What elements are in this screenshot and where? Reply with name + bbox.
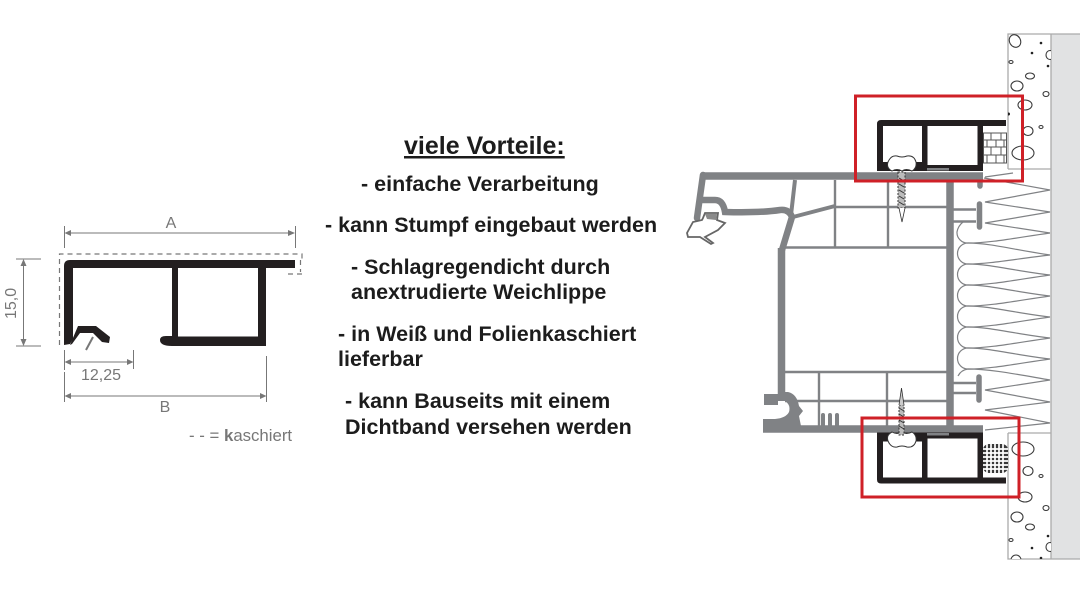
fixing anchor bottom bbox=[953, 383, 976, 393]
text block: advantages bbox=[325, 172, 657, 439]
legend: kaschiert: - - = kaschiert bbox=[189, 426, 292, 445]
advantage 2: - kann Stumpf eingebaut werden bbox=[325, 213, 657, 237]
advantage 3: anextrudierte Weichlippe bbox=[351, 280, 606, 304]
gasket lip bbox=[70, 326, 110, 350]
advantage 3: - Schlagregendicht durch bbox=[351, 255, 610, 279]
panel: window installation section bbox=[687, 33, 1080, 565]
inner webs bbox=[785, 180, 948, 426]
black profile section bbox=[64, 260, 295, 346]
profile bottom bbox=[877, 432, 1006, 484]
dimension 12,25 bbox=[64, 350, 134, 384]
dimension A bbox=[64, 215, 296, 248]
wall: concrete with stones bbox=[1007, 33, 1080, 565]
teeth on sill bbox=[823, 415, 837, 426]
dimension 15,0 bbox=[3, 259, 41, 346]
panel: profile cross-section diagram bbox=[3, 215, 302, 445]
small foil strip bbox=[927, 433, 949, 436]
heading: viele Vorteile: bbox=[404, 132, 565, 160]
wall: grey plaster band bbox=[1051, 34, 1080, 559]
profile top bbox=[877, 120, 1006, 171]
dimension B bbox=[64, 356, 266, 416]
advantage 4: lieferbar bbox=[338, 347, 423, 371]
dimension B: B bbox=[160, 399, 170, 416]
red highlight frame top bbox=[856, 96, 1022, 181]
window frame bbox=[697, 175, 983, 429]
small foil strip bbox=[927, 168, 949, 170]
clip gasket bbox=[888, 156, 916, 171]
brick sealing tape bbox=[984, 133, 1006, 163]
dashed laminated outline bbox=[60, 254, 302, 345]
foam sealing tape bbox=[983, 444, 1008, 473]
sash nose and glazing bead bbox=[697, 175, 703, 218]
dimension 15,0: 15,0 bbox=[3, 288, 20, 319]
screw bottom bbox=[899, 388, 904, 435]
advantage 4: - in Weiß und Folienkaschiert bbox=[338, 322, 636, 346]
red highlight frame bottom bbox=[862, 418, 1019, 497]
advantage 5: Dichtband versehen werden bbox=[345, 415, 632, 439]
clip gasket bbox=[888, 432, 916, 447]
screw top bbox=[898, 172, 905, 222]
lower nose of frame bbox=[763, 392, 803, 426]
advantage 5: - kann Bauseits mit einem bbox=[345, 389, 610, 413]
dimension 12,25: 12,25 bbox=[81, 367, 121, 384]
fixing anchor top bbox=[953, 210, 976, 222]
glazing gasket bbox=[687, 213, 725, 244]
frame outer walls bbox=[702, 176, 983, 429]
dimension A: A bbox=[166, 215, 177, 232]
insulation foam bbox=[957, 173, 1050, 430]
advantage 1: - einfache Verarbeitung bbox=[361, 172, 599, 196]
